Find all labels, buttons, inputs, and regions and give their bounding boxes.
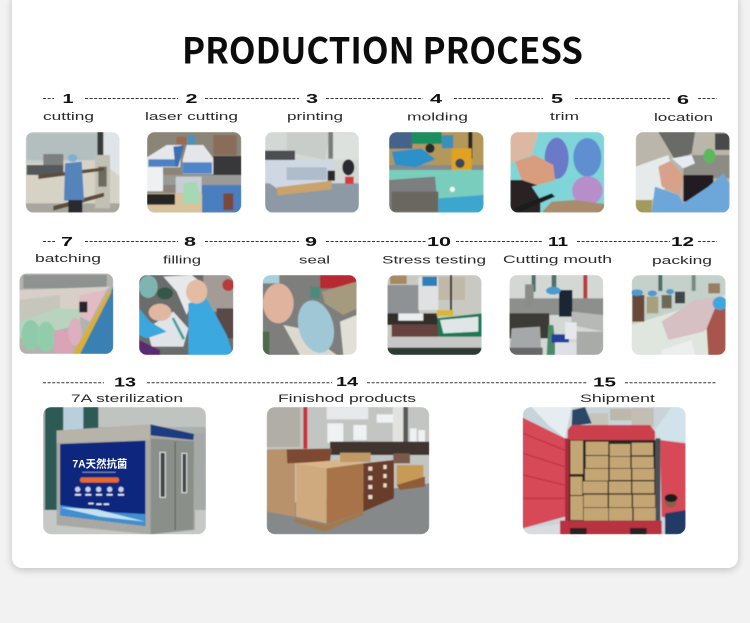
chamber sign text: 7A天然抗菌	[72, 457, 128, 470]
step row 1 timeline	[43, 92, 717, 107]
photo: molding	[389, 132, 484, 213]
step row 1 timeline: 5	[551, 92, 563, 106]
step 3 label: printing	[287, 111, 343, 123]
photo: 7A sterilization chamber	[43, 407, 206, 534]
step row 1 timeline: 4	[430, 92, 442, 106]
photo: cutting mouth	[509, 275, 603, 355]
step row 2 timeline	[43, 235, 717, 249]
photo: seal	[263, 275, 357, 357]
step row 1 timeline: 1	[62, 92, 74, 106]
step 2 label: laser cutting	[145, 111, 238, 123]
step 14 label: Finishod products	[278, 393, 417, 405]
step row 1 timeline: 6	[677, 93, 689, 107]
step 15 label: Shipment	[580, 393, 655, 405]
step row 3 timeline: 15	[593, 376, 616, 390]
step 9 label: seal	[299, 254, 330, 266]
step row 2 timeline: 11	[548, 235, 568, 249]
step 4 label: molding	[407, 112, 468, 124]
step 1 label: cutting	[43, 111, 94, 123]
step 8 label: filling	[163, 254, 201, 266]
step 11 label: Cutting mouth	[503, 254, 612, 266]
photo: shipment truck	[523, 407, 686, 534]
step row 1 timeline: 3	[306, 92, 318, 106]
step row 3 timeline: 13	[114, 376, 136, 390]
photo: cutting machine	[26, 132, 120, 213]
step row 3 timeline: 14	[336, 375, 358, 389]
step row 2 timeline: 12	[671, 235, 694, 249]
photo: trim	[510, 132, 604, 213]
photo: stress testing	[387, 275, 482, 355]
step row 2 timeline: 9	[305, 235, 317, 249]
step 13 label: 7A sterilization	[71, 393, 183, 405]
photo: packing	[631, 275, 727, 355]
photo: laser cutting	[147, 132, 241, 213]
photo: filling	[139, 275, 234, 355]
step 6 label: location	[654, 112, 713, 124]
photo: finished products warehouse	[267, 407, 429, 534]
title: PRODUCTION PROCESS	[182, 22, 583, 74]
step row 3 timeline	[43, 375, 717, 390]
step 12 label: packing	[652, 255, 712, 267]
step 10 label: Stress testing	[382, 254, 486, 266]
step row 2 timeline: 8	[184, 235, 196, 249]
photo: printing	[265, 132, 359, 213]
step 7 label: batching	[35, 253, 101, 265]
step 5 label: trim	[550, 111, 579, 123]
step row 2 timeline: 10	[427, 235, 451, 249]
photo: location	[636, 132, 730, 213]
photo: batching barrels	[19, 273, 113, 354]
step row 1 timeline: 2	[186, 92, 198, 106]
step row 2 timeline: 7	[61, 235, 73, 249]
